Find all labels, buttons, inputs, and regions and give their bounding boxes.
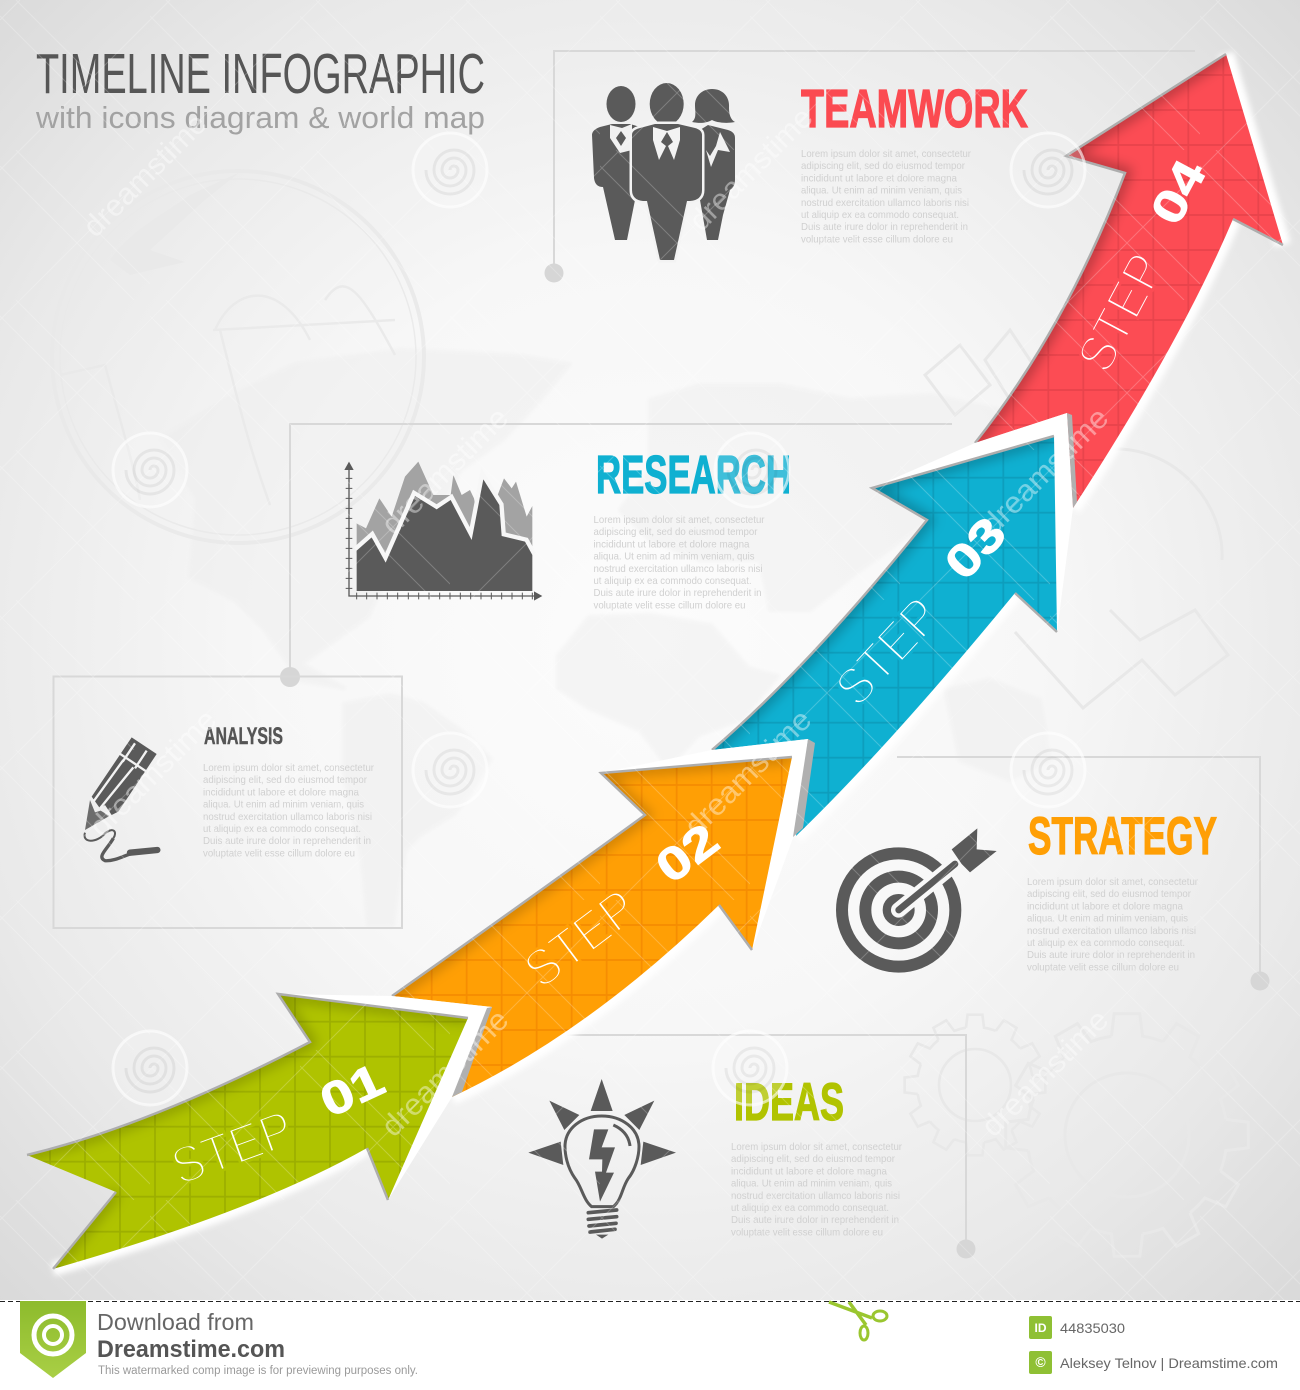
- panel: strategy frame: [897, 757, 1270, 990]
- watermark text: dreamstime: [975, 1003, 1115, 1143]
- watermark text: dreamstime: [83, 703, 223, 843]
- watermark text: [77, 101, 1115, 1143]
- text block: analysis: aliqua. Ut enim ad minim veniam, quis: [203, 800, 364, 811]
- footer text: author: Aleksey Telnov | Dreamstime.com: [1060, 1355, 1278, 1371]
- footer text: download from: Download from: [97, 1309, 254, 1335]
- heading: teamwork: TEAMWORK: [801, 80, 1028, 139]
- text block: strategy: aliqua. Ut enim ad minim veniam, quis: [1027, 914, 1188, 925]
- panel: teamwork frame: [544, 51, 1195, 282]
- text block: strategy: ut aliquip ex ea commodo consequat.: [1027, 938, 1185, 949]
- text block: strategy: [1027, 877, 1198, 973]
- arrow: step 03 blue: 03: [934, 507, 1016, 589]
- text block: strategy: incididunt ut labore et dolore magna: [1027, 901, 1183, 912]
- badge: id: ID: [1034, 1321, 1047, 1335]
- text block: analysis: nostrud exercitation ullamco laboris nisi: [203, 812, 372, 823]
- text block: ideas: voluptate velit esse cillum dolore eu: [731, 1227, 883, 1238]
- text block: teamwork: [801, 149, 971, 245]
- subtitle: with icons diagram & world map: [35, 100, 485, 135]
- watermark text: dreamstime: [77, 107, 214, 244]
- text block: research: adipiscing elit, sed do eiusmod tempor: [594, 527, 758, 538]
- text block: ideas: ut aliquip ex ea commodo consequat.: [731, 1203, 889, 1214]
- text block: research: voluptate velit esse cillum dolore eu: [594, 600, 746, 611]
- background gear outlines: [904, 330, 1250, 1258]
- badge: copyright: [1029, 1351, 1052, 1374]
- text block: strategy: Duis aute irure dolor in reprehenderit in: [1027, 950, 1195, 961]
- text block: teamwork: Duis aute irure dolor in reprehenderit in: [801, 222, 968, 233]
- badge: copyright: ©: [1035, 1354, 1046, 1370]
- text block: teamwork: ut aliquip ex ea commodo consequat.: [801, 210, 959, 221]
- watermark text: dreamstime: [375, 401, 515, 541]
- globe outline: [52, 171, 424, 543]
- text block: analysis: Lorem ipsum dolor sit amet, consectetur: [203, 763, 374, 774]
- text block: research: incididunt ut labore et dolore magna: [594, 539, 750, 550]
- icon: dreamstime ribbon: [20, 1301, 86, 1378]
- text block: ideas: aliqua. Ut enim ad minim veniam, quis: [731, 1179, 892, 1190]
- text block: ideas: nostrud exercitation ullamco laboris nisi: [731, 1191, 900, 1202]
- arrow: step 02 orange: [278, 757, 792, 1200]
- arrow: step 01 green: STEP: [164, 1100, 301, 1197]
- text block: teamwork: aliqua. Ut enim ad minim veniam, quis: [801, 186, 962, 197]
- arrow: step 01 green: 01: [312, 1053, 392, 1127]
- text block: analysis: ut aliquip ex ea commodo consequat.: [203, 824, 361, 835]
- text block: ideas: Lorem ipsum dolor sit amet, consectetur: [731, 1142, 902, 1153]
- arrow: step 03 blue: STEP: [824, 587, 952, 718]
- icon: area chart: [344, 462, 542, 601]
- text block: teamwork: Lorem ipsum dolor sit amet, consectetur: [801, 149, 971, 160]
- title: TIMELINE INFOGRAPHIC: [36, 42, 485, 106]
- text block: teamwork: adipiscing elit, sed do eiusmod tempor: [801, 161, 965, 172]
- arrow: step 03 blue: [662, 434, 1058, 837]
- watermark text: dreamstime: [975, 401, 1115, 541]
- text block: strategy: nostrud exercitation ullamco laboris nisi: [1027, 926, 1196, 937]
- text block: analysis: incididunt ut labore et dolore magna: [203, 787, 359, 798]
- arrow: step 04 red: 04: [1140, 151, 1216, 232]
- heading: research: RESEARCH: [596, 445, 791, 505]
- text block: research: ut aliquip ex ea commodo consequat.: [594, 576, 752, 587]
- text block: teamwork: nostrud exercitation ullamco laboris nisi: [801, 198, 969, 209]
- text block: research: nostrud exercitation ullamco laboris nisi: [594, 564, 762, 575]
- heading: ideas: IDEAS: [734, 1073, 844, 1132]
- icon: business team: [592, 83, 735, 260]
- text block: analysis: voluptate velit esse cillum dolore eu: [203, 848, 355, 859]
- watermark spirals: [113, 133, 1085, 1105]
- icon: pencil: [85, 737, 157, 861]
- icon: light bulb: [528, 1079, 676, 1239]
- panel: research frame: [280, 424, 952, 687]
- icon: scissors: [829, 1302, 887, 1340]
- footer text: disclaimer: This watermarked comp image is for previewing purposes only.: [98, 1365, 418, 1377]
- arrow: step 02 orange: 02: [646, 813, 728, 893]
- text block: strategy: adipiscing elit, sed do eiusmod tempor: [1027, 889, 1191, 900]
- title: [35, 42, 485, 135]
- text block: ideas: adipiscing elit, sed do eiusmod tempor: [731, 1154, 895, 1165]
- world map backdrop: [160, 350, 1060, 925]
- watermark text: dreamstime: [375, 1003, 515, 1143]
- text block: ideas: [731, 1142, 902, 1238]
- text block: research: aliqua. Ut enim ad minim veniam, quis: [594, 552, 754, 563]
- icon: target with dart: [842, 828, 997, 967]
- footer text: image id: 44835030: [1060, 1320, 1125, 1336]
- text block: teamwork: incididunt ut labore et dolore magna: [801, 173, 957, 184]
- panel: ideas frame: [567, 1035, 976, 1258]
- watermark text: dreamstime: [683, 101, 820, 238]
- badge: id: [1029, 1316, 1052, 1339]
- text block: strategy: voluptate velit esse cillum dolore eu: [1027, 962, 1179, 973]
- text block: strategy: Lorem ipsum dolor sit amet, consectetur: [1027, 877, 1198, 888]
- text block: analysis: adipiscing elit, sed do eiusmod tempor: [203, 775, 367, 786]
- panel: analysis frame: [54, 676, 402, 928]
- heading: analysis: ANALYSIS: [204, 723, 283, 750]
- text block: research: [594, 515, 765, 611]
- arrow: step 01 green: [27, 994, 468, 1269]
- footer strip: [0, 1301, 1300, 1390]
- text block: ideas: incididunt ut labore et dolore magna: [731, 1166, 887, 1177]
- text block: analysis: [203, 763, 374, 859]
- text block: teamwork: voluptate velit esse cillum dolore eu: [801, 234, 953, 245]
- arrow: step 04 red: [872, 54, 1283, 632]
- arrow: step 04 red: STEP: [1066, 244, 1176, 382]
- text block: ideas: Duis aute irure dolor in reprehenderit in: [731, 1215, 899, 1226]
- arrow: step 02 orange: STEP: [514, 878, 648, 1000]
- watermark text: dreamstime: [678, 703, 818, 843]
- footer text: dreamstime: Dreamstime.com: [97, 1336, 285, 1363]
- text block: analysis: Duis aute irure dolor in reprehenderit in: [203, 836, 371, 847]
- text block: research: Duis aute irure dolor in reprehenderit in: [594, 588, 762, 599]
- text block: research: Lorem ipsum dolor sit amet, consectetur: [594, 515, 765, 526]
